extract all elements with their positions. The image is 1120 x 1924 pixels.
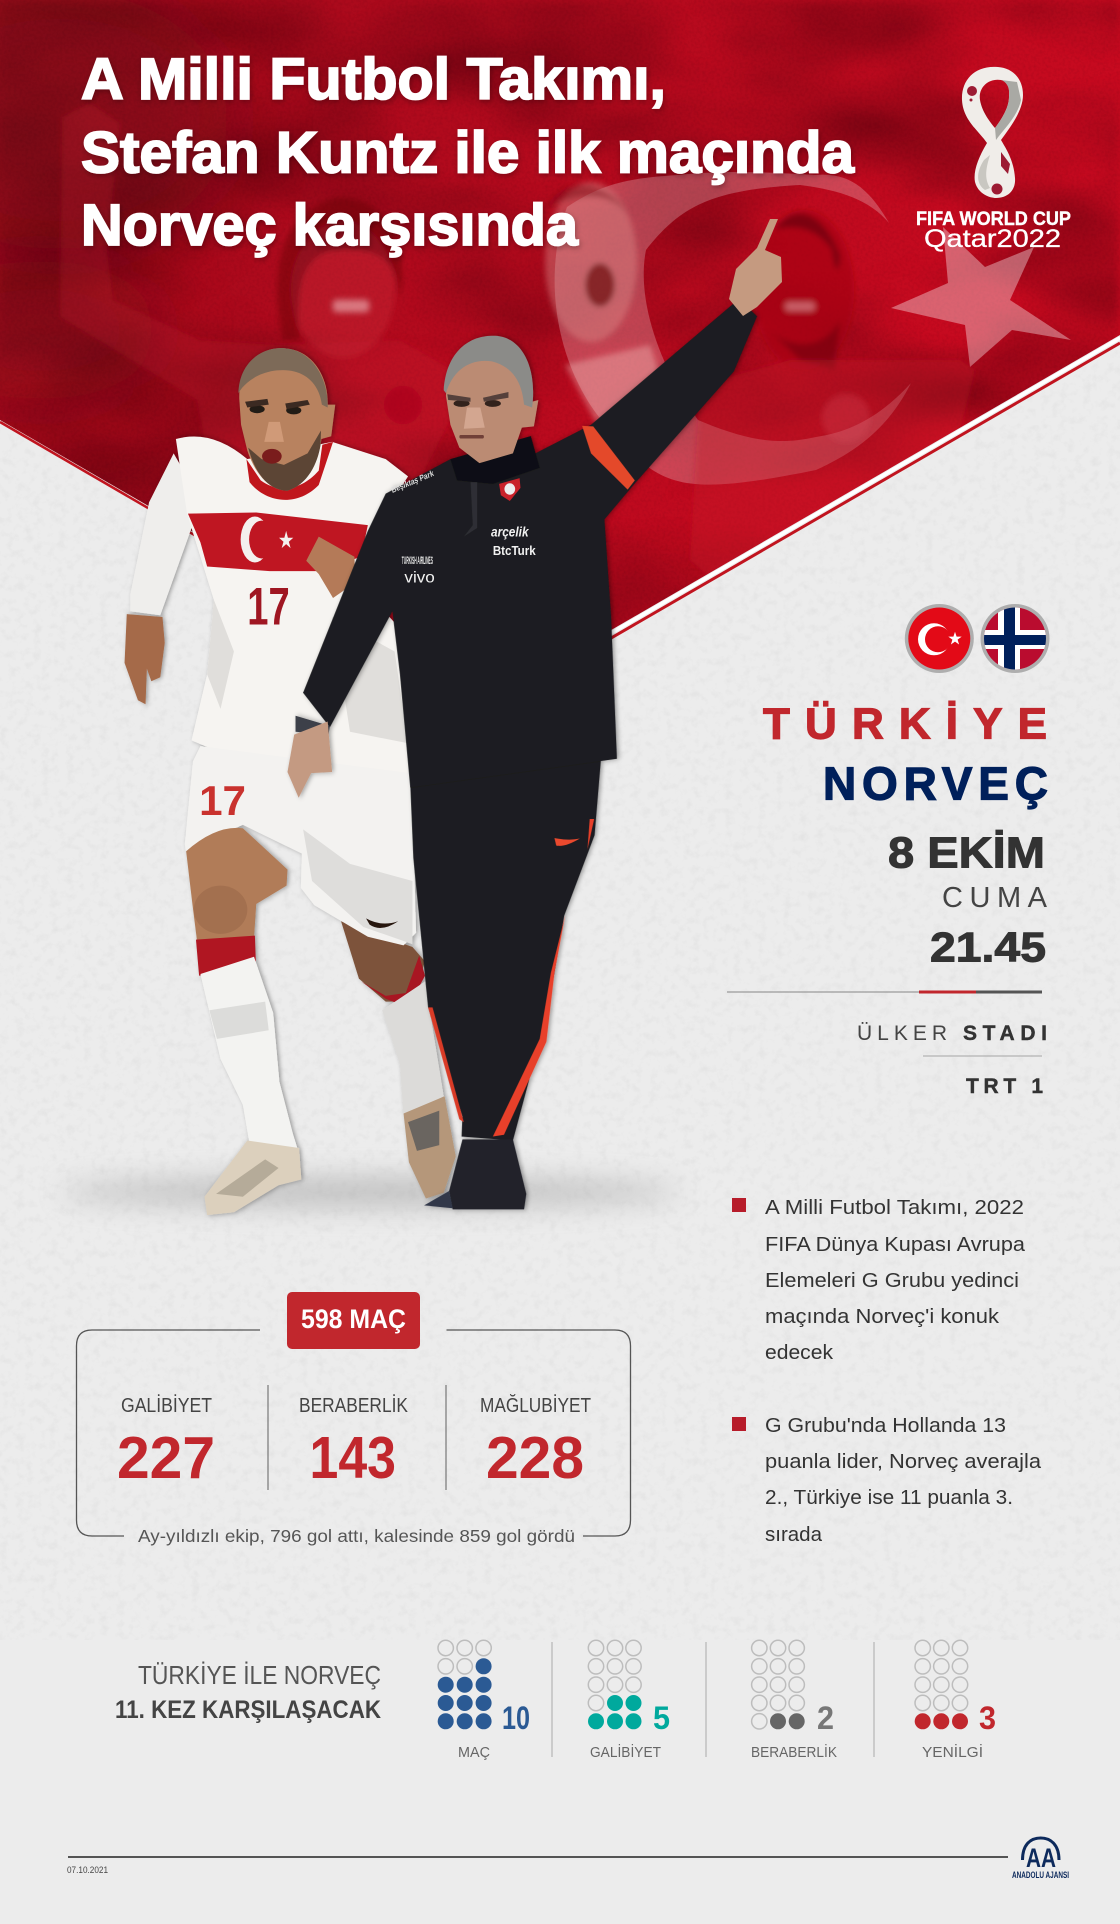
text block: notes xyxy=(732,1196,1042,1546)
chart: draws dots: BERABERLİK xyxy=(751,1743,837,1761)
near leg xyxy=(186,828,301,1215)
stat: draws: 143 xyxy=(310,1425,396,1491)
badge xyxy=(499,478,521,501)
figure: running player in white kit xyxy=(125,348,456,1215)
goals note: Ay-yıldızlı ekip, 796 gol attı, kalesinde 859 gol gördü xyxy=(138,1526,575,1546)
team names: NORVEÇ xyxy=(823,757,1048,809)
chart: wins dots: 5 xyxy=(653,1700,670,1736)
coach jacket: BtcTurk xyxy=(493,545,536,558)
ground shadow beneath figures xyxy=(60,1178,680,1206)
chart: losses dots: YENİLGİ xyxy=(922,1743,983,1761)
footer xyxy=(67,1838,1069,1881)
stat: wins xyxy=(117,1394,215,1491)
panel: red flag banner with faded players xyxy=(0,0,1120,630)
stat: losses xyxy=(480,1394,591,1491)
bullet two: 2., Türkiye ise 11 puanla 3. xyxy=(765,1486,1013,1509)
logo: FIFA World Cup Qatar 2022: FIFA WORLD CUP xyxy=(916,209,1071,230)
coach jacket: vivo xyxy=(404,569,435,587)
panel: all-time record xyxy=(76,1292,630,1546)
stat: draws xyxy=(299,1394,409,1491)
title: Stefan Kuntz ile ilk maçında xyxy=(81,120,855,186)
bullet one: edecek xyxy=(765,1341,834,1364)
bullet two xyxy=(732,1414,1042,1546)
faded flag crescent xyxy=(555,172,911,485)
coach jacket: Beşiktaş Park xyxy=(391,468,435,495)
faded left player xyxy=(60,103,470,480)
chart: losses dots: 3 xyxy=(979,1700,996,1736)
stat: losses: MAĞLUBİYET xyxy=(480,1394,591,1417)
coach head xyxy=(444,336,538,463)
bullet one xyxy=(732,1196,1026,1364)
title xyxy=(81,47,855,258)
icon: figure eight emblem xyxy=(962,67,1023,198)
total matches badge xyxy=(287,1292,420,1349)
logo: FIFA World Cup Qatar 2022: Qatar2022 xyxy=(924,225,1061,253)
stadium: STADI xyxy=(963,1022,1047,1045)
chart: draws dots: 2 xyxy=(817,1700,834,1736)
team names: TÜRKİYE xyxy=(763,699,1047,748)
diagonal banner edges xyxy=(0,338,1120,710)
coach jacket: arçelik xyxy=(491,524,530,540)
team names xyxy=(763,699,1048,809)
chart: matches dots: 10 xyxy=(502,1700,530,1736)
far leg xyxy=(341,921,456,1198)
panel: match details xyxy=(727,600,1050,1098)
stat: losses: 228 xyxy=(486,1425,584,1491)
coach trousers xyxy=(410,760,601,1140)
match date and time xyxy=(888,828,1048,970)
logo: Anadolu Ajansı: ANADOLU AJANSI xyxy=(1012,1870,1069,1881)
figure: coach in black tracksuit xyxy=(287,299,757,1209)
bullet one: FIFA Dünya Kupası Avrupa xyxy=(765,1233,1026,1256)
footer: 07.10.2021 xyxy=(67,1865,108,1875)
player raised hand xyxy=(306,537,355,598)
separator xyxy=(727,991,1042,993)
match date and time: CUMA xyxy=(942,882,1048,914)
logo: Anadolu Ajansı: AA xyxy=(1026,1843,1056,1873)
logo: Anadolu Ajansı xyxy=(1012,1838,1069,1881)
heading: head-to-head xyxy=(115,1660,381,1724)
stadium xyxy=(857,1022,1047,1045)
player arm hand xyxy=(125,614,165,704)
match date and time: 21.45 xyxy=(930,924,1046,970)
coach jacket: TURKISH AIRLINES xyxy=(402,555,433,568)
player shorts: 17 xyxy=(199,777,246,824)
chart: wins dots: GALİBİYET xyxy=(590,1743,661,1761)
total matches badge: 598 MAÇ xyxy=(301,1304,406,1334)
player head xyxy=(238,348,335,491)
chart: matches dots: MAÇ xyxy=(458,1744,490,1761)
player jersey: 17 xyxy=(247,578,290,637)
broadcaster: TRT 1 xyxy=(966,1075,1043,1098)
logo: FIFA World Cup Qatar 2022 xyxy=(916,67,1071,253)
chart: losses dots xyxy=(915,1640,996,1761)
coach pointing hand xyxy=(729,219,782,316)
faded right player xyxy=(692,210,974,574)
title: A Milli Futbol Takımı, xyxy=(81,47,666,112)
player jersey xyxy=(130,436,414,786)
chart: draws dots xyxy=(751,1640,837,1761)
bullet one: A Milli Futbol Takımı, 2022 xyxy=(765,1196,1024,1219)
bullet two: puanla lider, Norveç averajla xyxy=(765,1450,1042,1473)
stadium: ÜLKER xyxy=(857,1022,947,1045)
match date and time: 8 EKİM xyxy=(888,828,1045,878)
bullet two: G Grubu'nda Hollanda 13 xyxy=(765,1414,1006,1437)
icon: Norwegian flag xyxy=(980,600,1050,675)
coach jacket xyxy=(303,299,757,787)
icon: Turkish flag xyxy=(905,604,974,673)
coach lower hand and watch xyxy=(287,716,332,798)
chart: wins dots xyxy=(588,1640,670,1761)
stat: wins: 227 xyxy=(117,1425,215,1491)
bullet one: maçında Norveç'i konuk xyxy=(765,1305,1000,1328)
coach shoes xyxy=(424,1139,526,1209)
stat: wins: GALİBİYET xyxy=(121,1394,212,1417)
faded flag star xyxy=(891,227,1071,367)
faded middle player xyxy=(545,182,660,430)
chart: matches dots xyxy=(438,1640,530,1761)
heading: head-to-head: TÜRKİYE İLE NORVEÇ xyxy=(138,1660,381,1690)
title: Norveç karşısında xyxy=(81,193,579,258)
bullet one: Elemeleri G Grubu yedinci xyxy=(765,1269,1019,1292)
player shorts xyxy=(185,746,416,945)
heading: head-to-head: 11. KEZ KARŞILAŞACAK xyxy=(115,1696,381,1724)
bullet two: sırada xyxy=(765,1523,823,1546)
stat: draws: BERABERLİK xyxy=(299,1394,409,1417)
